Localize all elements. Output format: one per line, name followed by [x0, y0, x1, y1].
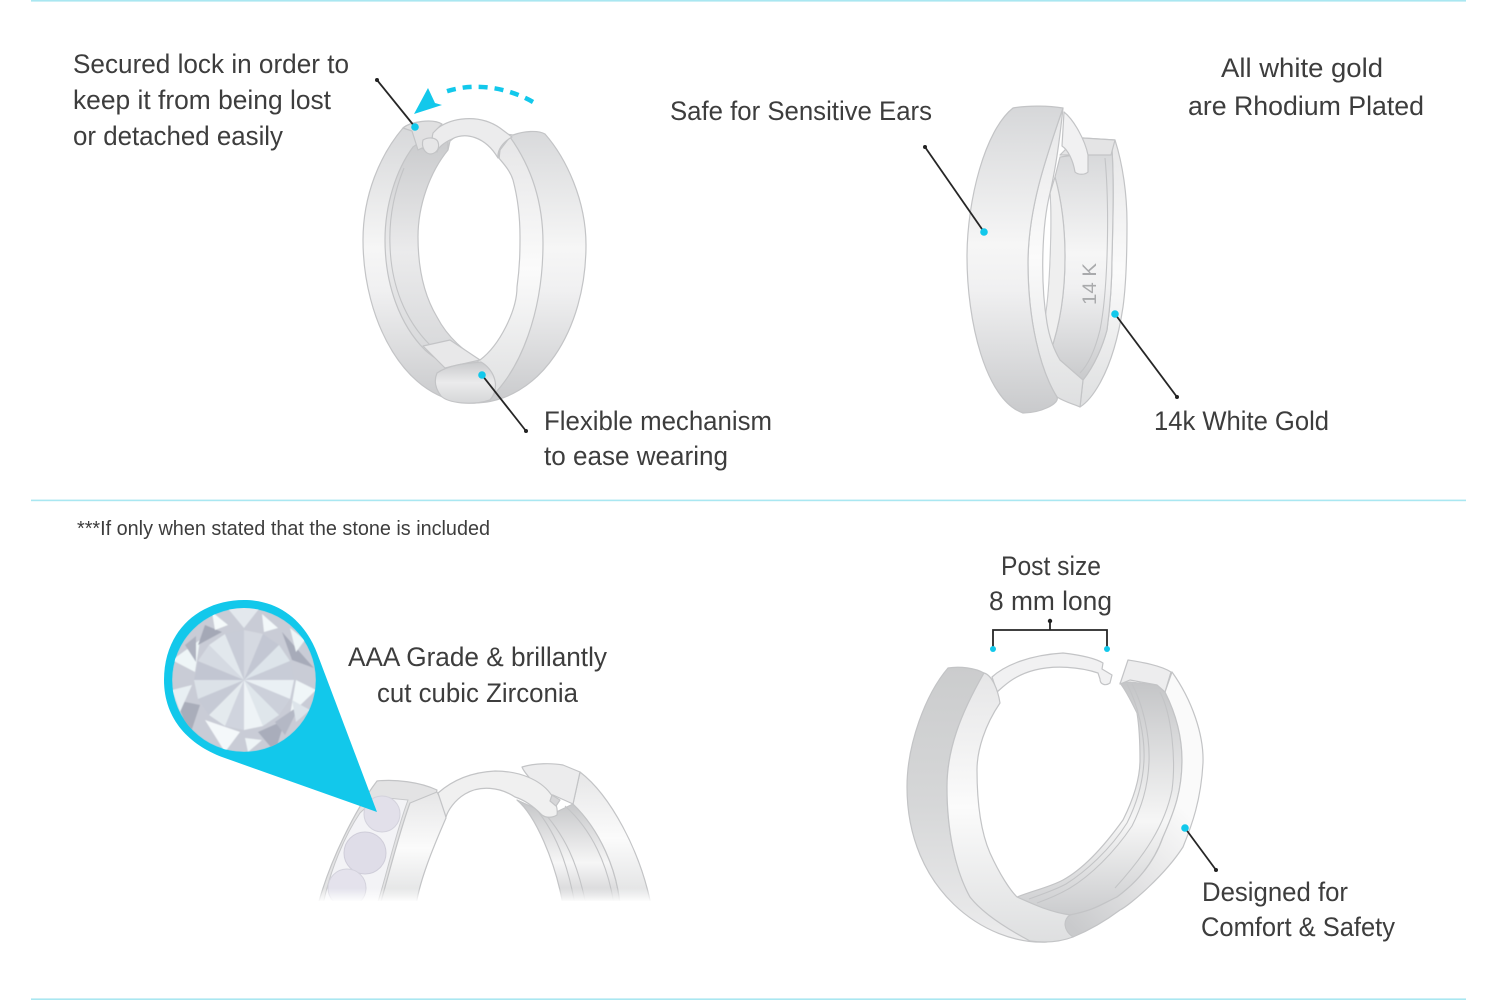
- text: comfort and safety: Comfort & Safety: [1201, 912, 1395, 942]
- callout: flexible mechanism leader: [478, 371, 528, 433]
- text: flexible mechanism: to ease wearing: [544, 441, 728, 471]
- text: comfort and safety: [1201, 877, 1395, 942]
- text: zirconia grade: AAA Grade & brillantly: [348, 642, 607, 672]
- text: comfort and safety: Designed for: [1202, 877, 1348, 907]
- stone: second: [344, 832, 386, 874]
- earring: open view with post: [907, 653, 1203, 942]
- text: post size: Post size: [1001, 551, 1101, 581]
- text: post size: 8 mm long: [989, 586, 1112, 616]
- text: safe for sensitive ears: Safe for Sensitive Ears: [670, 96, 932, 126]
- callout: comfort leader: [1181, 824, 1218, 872]
- stone: first: [364, 796, 400, 832]
- earring: secured lock view: [363, 119, 586, 403]
- text: flexible mechanism: Flexible mechanism: [544, 406, 772, 436]
- earring: lower left with stone channel: [319, 763, 650, 900]
- text: zirconia grade: [348, 642, 607, 708]
- text: rhodium plated: [1188, 53, 1424, 121]
- icon: gem: [172, 605, 316, 752]
- callout: sensitive ears leader: [923, 145, 988, 236]
- arrow: rotate the lock: [414, 87, 533, 114]
- stone: third: [328, 868, 366, 898]
- text: rhodium plated: All white gold: [1221, 53, 1383, 83]
- text: zirconia grade: cut cubic Zirconia: [377, 678, 579, 708]
- text: flexible mechanism: [544, 406, 772, 471]
- earring: side view with 14K stamp: 14 K: [1080, 263, 1101, 305]
- text: post size: [989, 551, 1112, 616]
- text: secured lock: [73, 49, 349, 151]
- callout: 14k gold leader: [1111, 310, 1179, 399]
- text: secured lock: keep it from being lost: [73, 85, 331, 115]
- text: rhodium plated: are Rhodium Plated: [1188, 91, 1424, 121]
- magnifier: cyan callout and gem: [164, 600, 377, 812]
- earring: side view with 14K stamp: [967, 106, 1127, 413]
- bracket: post size: [990, 619, 1110, 652]
- text: secured lock: Secured lock in order to: [73, 49, 349, 79]
- text: 14k white gold: 14k White Gold: [1154, 406, 1329, 436]
- callout: secured lock leader: [375, 78, 419, 131]
- text: secured lock: or detached easily: [73, 121, 283, 151]
- text: stone footnote: ***If only when stated that the stone is included: [77, 518, 490, 540]
